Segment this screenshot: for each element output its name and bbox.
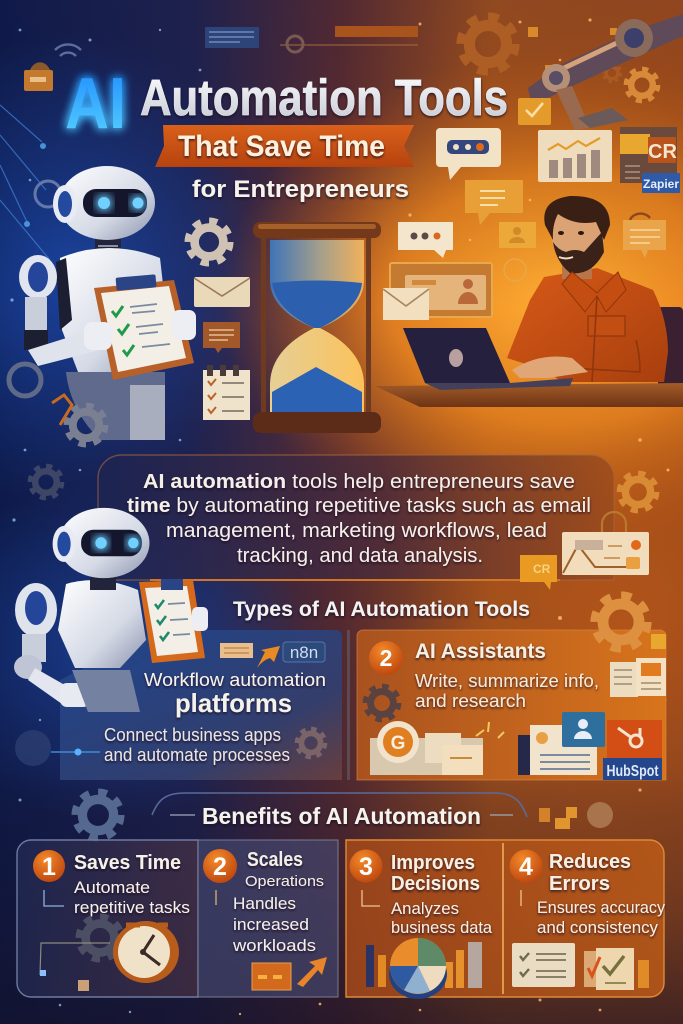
robot head <box>53 166 155 240</box>
description text: AI automation tools help entrepreneurs save <box>143 471 575 493</box>
robot side band <box>56 258 72 330</box>
icon: dark gear <box>365 686 399 720</box>
panel description <box>415 671 599 711</box>
icon: gold squares <box>504 27 617 281</box>
icon: profile card and envelope <box>383 263 492 320</box>
robot 2 arm <box>14 583 90 707</box>
benefit 3 text: Improves <box>391 852 475 874</box>
number badge 3 <box>350 850 382 882</box>
number badge <box>369 641 403 675</box>
hourglass frame <box>253 222 381 433</box>
icon: gear top right of description <box>620 474 656 510</box>
description text <box>127 471 591 567</box>
benefit cards background <box>17 840 664 997</box>
icon: CR bubble: CR <box>533 562 551 576</box>
connector 2 <box>215 890 217 905</box>
heading: benefits <box>152 793 527 829</box>
connector 3 <box>362 890 380 906</box>
icon: book <box>610 658 666 697</box>
icon: wifi and lock <box>24 44 81 91</box>
number badge 2 <box>203 849 237 883</box>
icon: Zapier tag: Zapier <box>643 177 679 191</box>
icon: gear benefits <box>75 792 121 838</box>
panel description: and research <box>415 691 526 711</box>
collar <box>562 272 626 312</box>
icon: small document <box>203 322 240 353</box>
icon: Zapier tag <box>642 173 680 193</box>
hourglass bottom sand <box>272 367 362 412</box>
benefit 4 text: Ensures accuracy <box>537 899 666 917</box>
benefit 2 text: increased <box>233 915 309 934</box>
benefit 1 text: repetitive tasks <box>74 898 190 917</box>
benefit 3 text: business data <box>391 918 493 937</box>
number badge 4 <box>510 850 542 882</box>
icon: small person card <box>499 222 536 248</box>
head <box>544 196 610 279</box>
icon: robot arm <box>528 14 683 130</box>
icon: large gear right <box>595 596 647 648</box>
icon: CR doc stack: CR <box>648 141 677 163</box>
hands <box>512 356 588 378</box>
title: AI <box>65 64 126 144</box>
benefit 3 text: Analyzes <box>391 899 459 918</box>
panel description: Connect business apps <box>104 725 281 745</box>
benefit 2 text: Handles <box>233 894 296 913</box>
man at laptop <box>375 196 683 407</box>
benefit 3 text: Decisions <box>391 873 480 895</box>
robot base and lower parts <box>9 364 165 444</box>
circuit lines left <box>0 105 61 260</box>
icon: gear and clock <box>40 917 179 991</box>
benefit 1: saves time <box>33 850 190 991</box>
hourglass top sand <box>272 280 362 328</box>
icon: pie chart and bars <box>366 938 482 999</box>
icon: check badge <box>518 98 551 125</box>
icon: orange square <box>651 634 666 649</box>
number badge 1 <box>33 850 65 882</box>
divider <box>347 630 350 780</box>
robot 2 torso <box>58 580 146 668</box>
heading: benefits: Benefits of AI Automation <box>202 803 481 829</box>
description text: time by automating repetitive tasks such as email <box>127 495 591 517</box>
icon: gear <box>297 729 325 757</box>
description panel <box>98 455 614 580</box>
robot 2 neck <box>90 574 116 590</box>
robot torso <box>60 248 167 372</box>
subtitle ribbon <box>155 125 414 167</box>
icon: Grammarly envelope <box>370 721 504 775</box>
robot hands <box>84 310 196 350</box>
benefit 3 text <box>391 852 493 937</box>
benefit 2 text: Operations <box>245 873 324 890</box>
benefit 2 text: workloads <box>232 936 316 955</box>
shirt details <box>570 296 640 382</box>
subheading: for Entrepreneurs <box>192 176 409 203</box>
robot shoulder and arm <box>19 255 100 366</box>
benefit 4 text <box>537 851 666 937</box>
benefit 2 text <box>232 849 324 955</box>
benefit 1 text: Automate <box>74 878 150 897</box>
connector 1 <box>44 890 64 906</box>
icon: HubSpot tile: HubSpot <box>606 763 658 780</box>
icon: checklists <box>512 943 649 990</box>
benefit 4 text: Errors <box>549 873 610 895</box>
icon: right bubble with arrow <box>623 214 666 258</box>
shirt <box>507 268 668 382</box>
panel: benefits <box>17 840 666 999</box>
panel heading: AI Assistants <box>415 640 546 663</box>
benefit 3: improves decisions <box>350 850 493 999</box>
icon: gold bubble <box>465 180 523 225</box>
panel heading <box>144 670 326 718</box>
panel heading: Workflow automation <box>144 670 326 690</box>
number badge 2: 2 <box>213 853 227 881</box>
benefit 4: reduces errors <box>510 850 666 990</box>
robot 2 clipboard <box>139 579 208 663</box>
icon: box and growth arrow <box>252 957 327 990</box>
desk <box>375 383 683 407</box>
benefit 1 text <box>74 852 190 917</box>
panel: AI assistants <box>357 630 666 780</box>
robot 2 with clipboard <box>14 508 208 712</box>
icon: left envelope <box>194 277 250 307</box>
chair <box>658 307 683 387</box>
icon: Grammarly envelope: G <box>391 733 405 754</box>
icon: document stack and profile badge <box>518 712 605 775</box>
icon: speech bubble <box>436 128 501 180</box>
number badge 4: 4 <box>519 853 533 881</box>
benefit 2 text: Scales <box>247 849 303 871</box>
subtitle ribbon: That Save Time <box>178 130 385 163</box>
icon: orange top bar <box>280 26 418 52</box>
connector 4 <box>520 890 522 906</box>
panel heading: platforms <box>175 688 292 718</box>
icon: CR bubble <box>520 555 557 590</box>
icon: workflow tag and n8n badge <box>220 642 325 668</box>
icon: top document <box>205 27 259 48</box>
benefit 4 text: Reduces <box>549 851 631 873</box>
title <box>65 64 508 144</box>
icon: CR doc stack <box>620 127 677 183</box>
number badge 3: 3 <box>359 853 373 881</box>
number badge: 2 <box>380 645 392 671</box>
description text: tracking, and data analysis. <box>237 545 483 567</box>
description text: management, marketing workflows, lead <box>166 520 547 542</box>
benefit 1 text: Saves Time <box>74 852 181 874</box>
icon: HubSpot tile <box>603 720 662 780</box>
robot 2 head <box>53 508 150 578</box>
benefit 2: scales operations <box>203 849 327 990</box>
icon: chart panel <box>538 130 612 182</box>
icon: dots bubble <box>398 222 453 258</box>
icon: checklist calendar <box>203 365 250 420</box>
clipboard <box>94 274 194 380</box>
icon: gears top right <box>461 17 658 101</box>
icon: dim network node <box>15 730 100 766</box>
benefit 4 text: and consistency <box>537 919 659 937</box>
hourglass <box>253 222 381 433</box>
panel description <box>104 725 290 765</box>
panel: workflow automation platforms <box>60 630 342 780</box>
robot 2 lower body <box>72 670 140 712</box>
hourglass glass bottom <box>270 328 364 412</box>
panel description: Write, summarize info, <box>415 671 599 691</box>
icon: envelope card <box>562 512 649 575</box>
hourglass glass top <box>270 240 364 328</box>
laptop <box>403 328 573 390</box>
icon: workflow tag and n8n badge: n8n <box>290 643 318 662</box>
icon: gear near robot <box>188 221 230 263</box>
icon: dim gear left <box>30 466 62 498</box>
title: Automation Tools <box>140 69 508 126</box>
robot with clipboard <box>9 166 196 444</box>
heading: types: Types of AI Automation Tools <box>233 598 530 621</box>
icon: orange blocks right of benefits <box>539 802 613 829</box>
panel description: and automate processes <box>104 745 290 765</box>
number badge 1: 1 <box>42 853 56 881</box>
robot neck <box>95 238 121 260</box>
